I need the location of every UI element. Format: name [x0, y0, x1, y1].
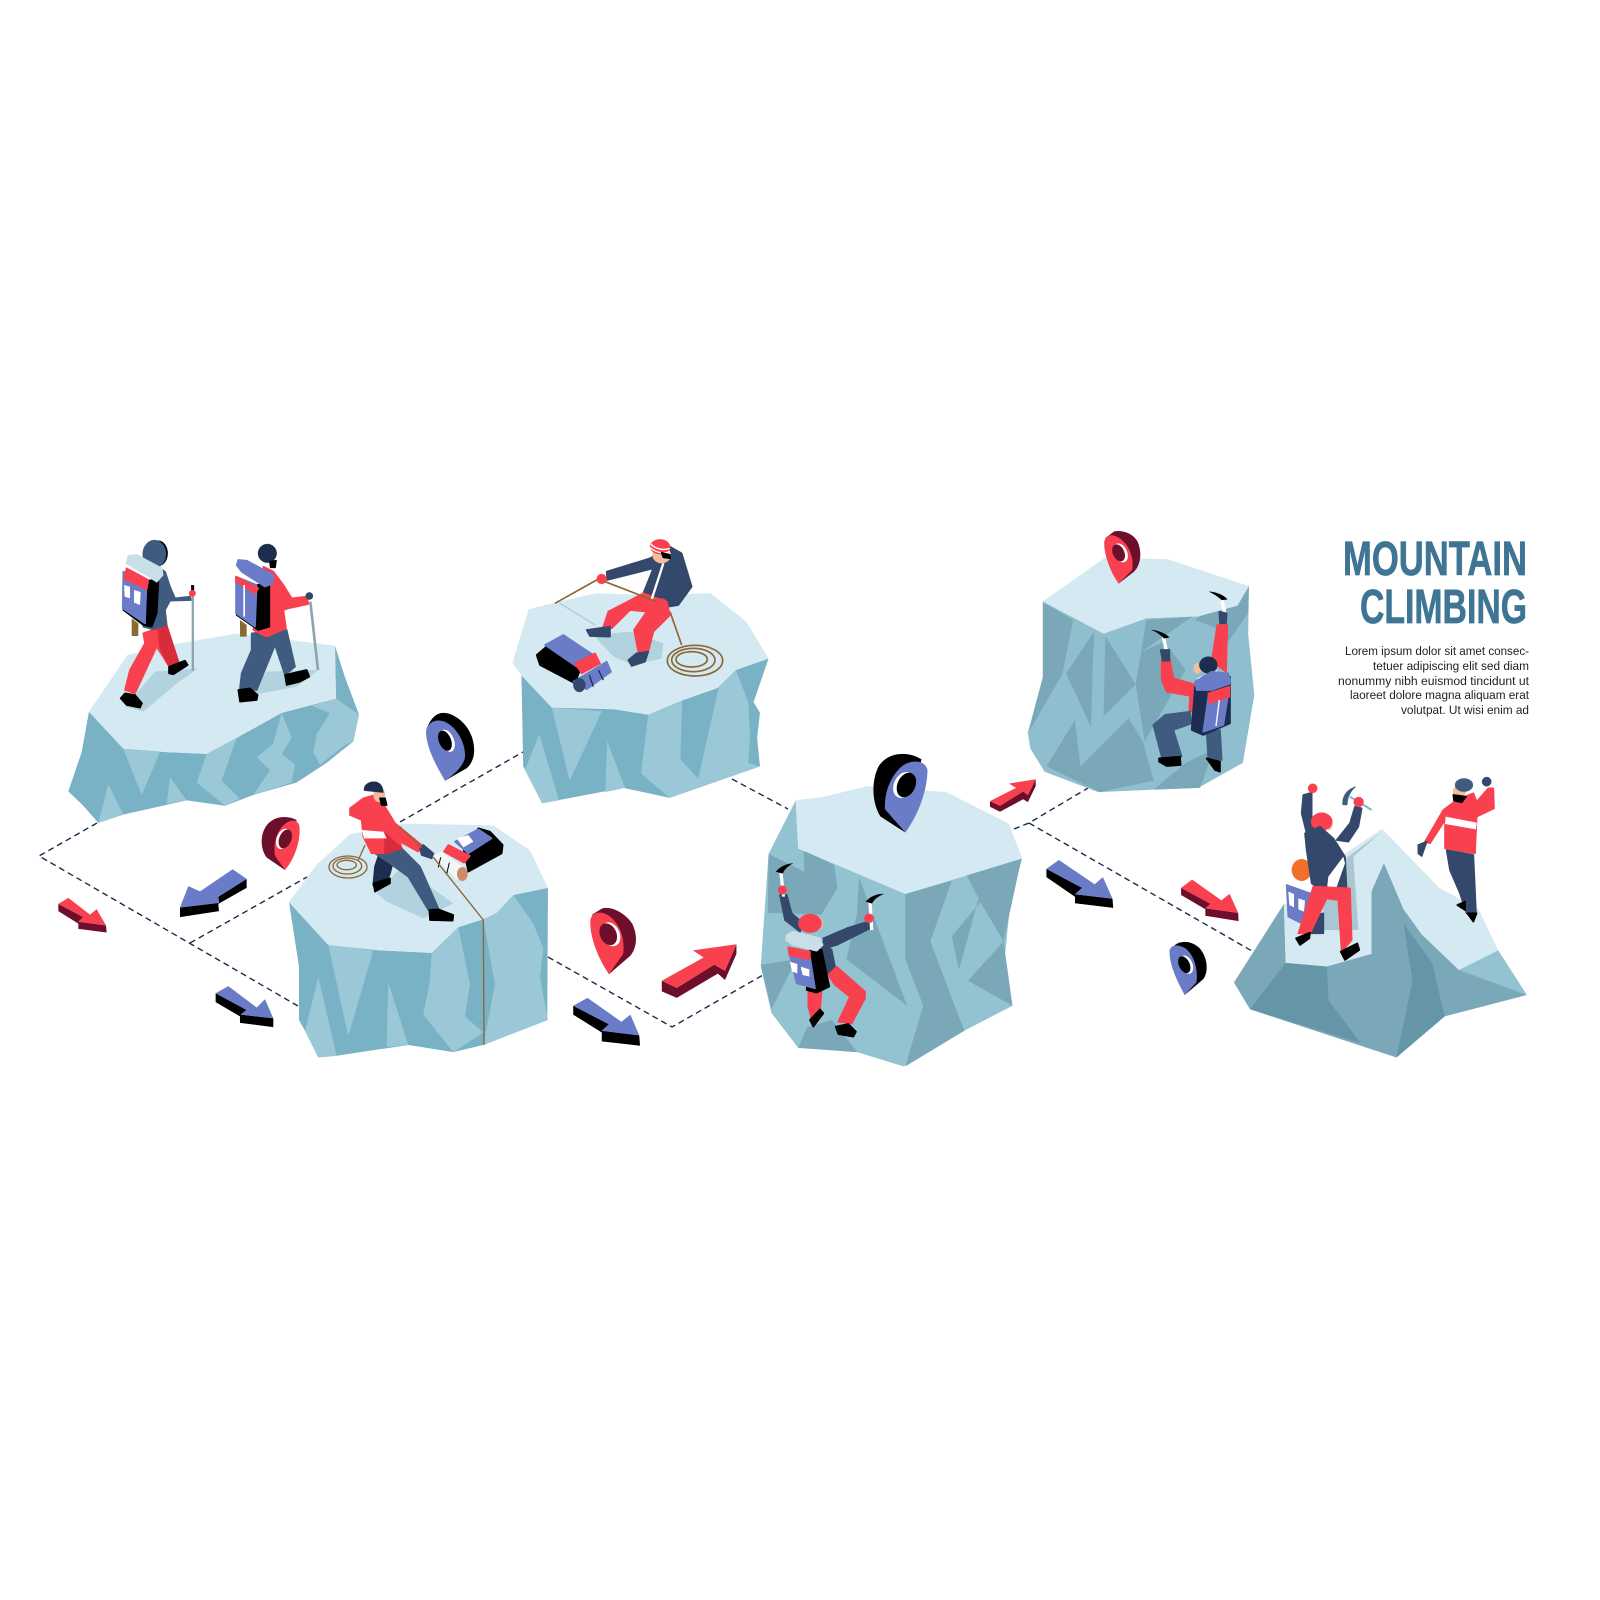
rope man with red jacket [329, 782, 503, 1045]
icon: red arrow up-right small [990, 779, 1036, 812]
panel: tall ice block with climber [761, 786, 1022, 1066]
icon: blue arrow right [1046, 860, 1113, 908]
icon: blue map pin [426, 713, 474, 781]
description text: volutpat. Ut wisi enim ad [1401, 703, 1529, 717]
icon: red map pin [262, 817, 300, 870]
icon: blue arrow down-left [180, 869, 247, 917]
icon: red arrow up-right large [662, 944, 736, 998]
title [1343, 533, 1527, 634]
panel: mountain peak [1234, 829, 1527, 1057]
description text: tetuer adipiscing elit sed diam [1373, 659, 1529, 673]
seated man pulling rope [555, 539, 723, 676]
title: MOUNTAIN [1343, 533, 1527, 586]
summit companion waving [1418, 777, 1494, 922]
icon: red map pin top [1104, 531, 1140, 584]
centre section of the route [512, 593, 1036, 1066]
hiker one with dark jacket [121, 540, 198, 712]
description text: Lorem ipsum dolor sit amet consec- [1345, 644, 1529, 658]
icon: red arrow right [1181, 880, 1239, 921]
icon: blue arrow down-right [216, 986, 273, 1027]
hiker two with red jacket [236, 544, 319, 702]
icon: red map pin middle [590, 908, 636, 974]
icon: red small arrow [58, 898, 107, 932]
description text: laoreet dolore magna aliquam erat [1350, 688, 1530, 702]
dashed route line [39, 752, 1252, 1027]
panel: ice block with rope man [289, 824, 548, 1057]
panel: ice block with seated man [512, 593, 769, 803]
summit climber raising arms [1287, 784, 1382, 960]
title: CLIMBING [1360, 581, 1527, 634]
sleeping bag roll [537, 635, 611, 692]
description text [1338, 644, 1530, 717]
panel: ice block with hikers [68, 634, 359, 823]
centre ice climber [776, 863, 883, 1037]
icon: blue map pin low [1170, 942, 1207, 995]
icon: blue arrow down-right large [573, 998, 640, 1046]
wall climber [1152, 592, 1231, 772]
left section of the route [58, 634, 548, 1057]
icon: blue map pin large [873, 754, 927, 832]
right section of the route [1028, 531, 1527, 1057]
description text: nonummy nibh euismod tincidunt ut [1338, 674, 1530, 688]
panel: ice block with wall climber [1028, 557, 1254, 792]
